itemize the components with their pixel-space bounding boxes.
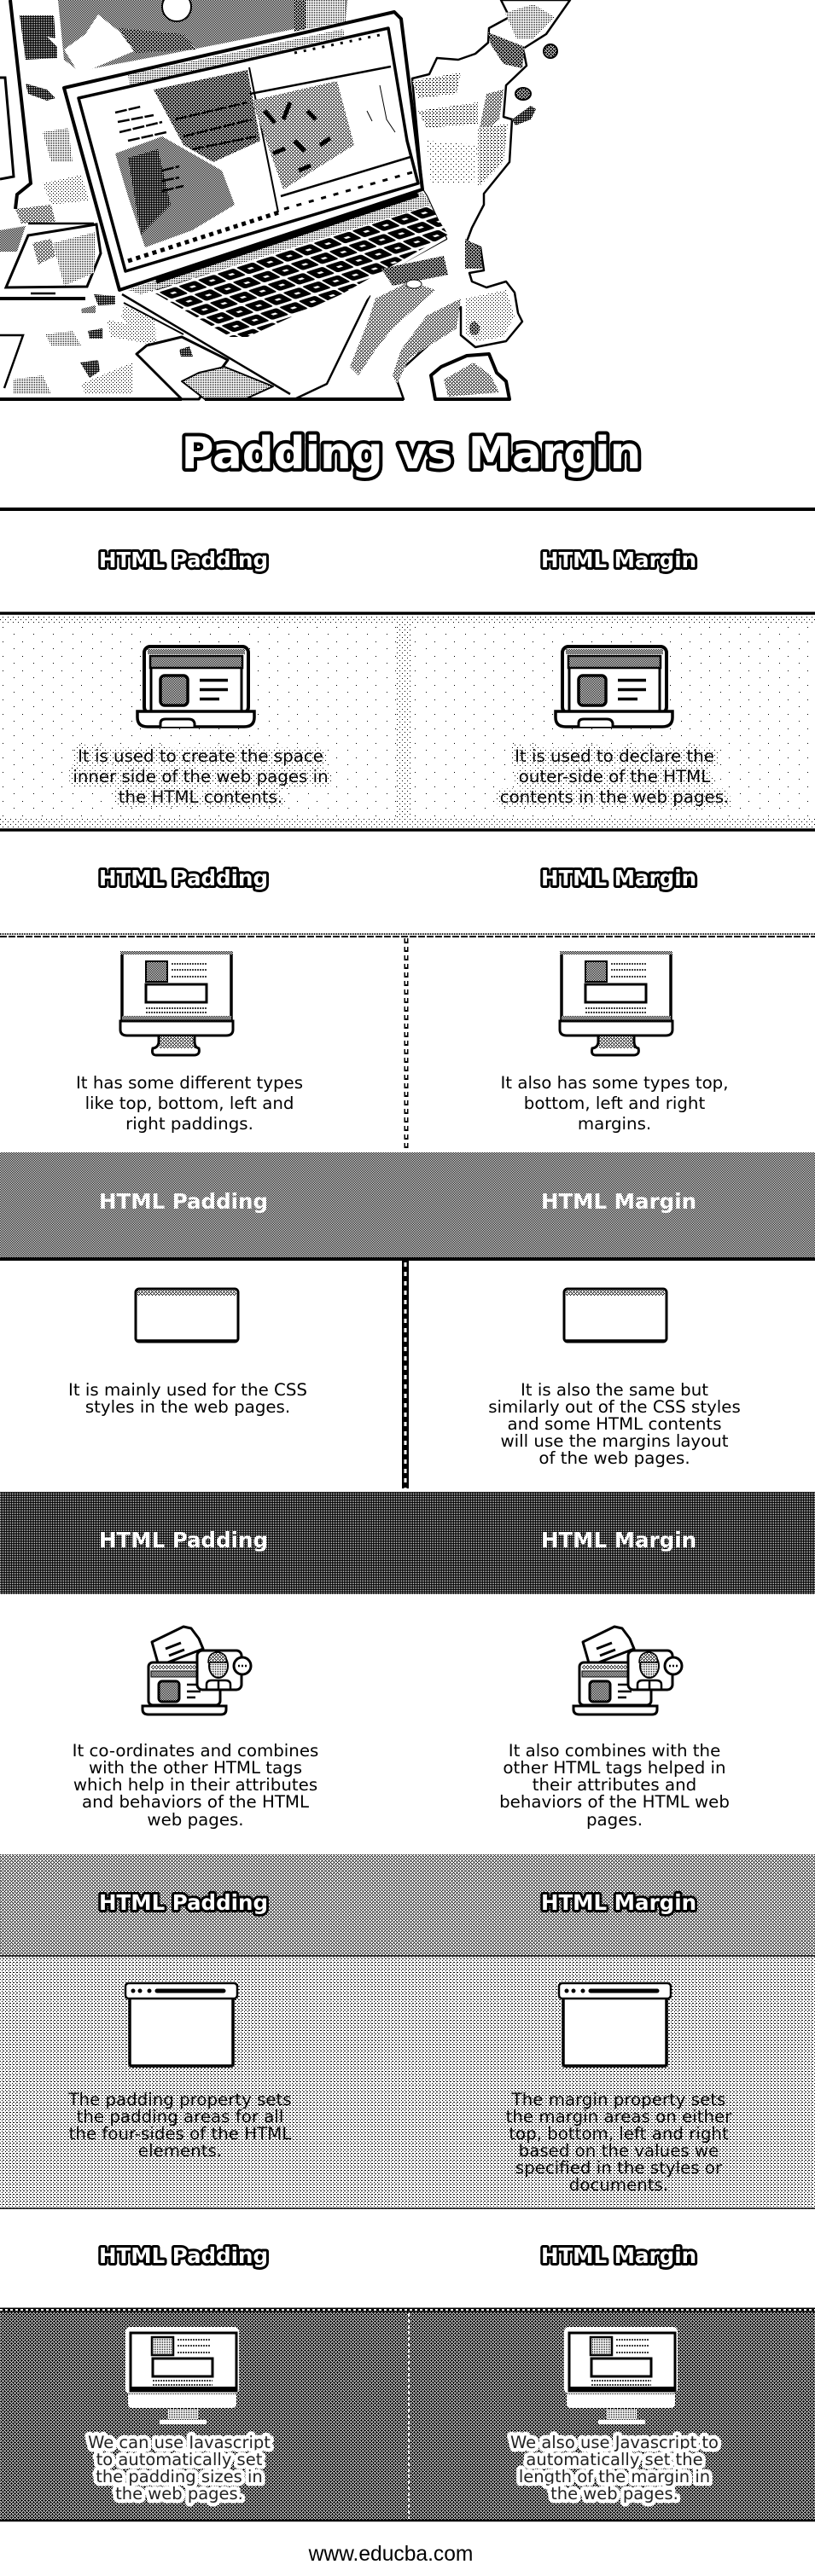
text: margin point 4: pages. <box>586 1810 643 1830</box>
icon: monitor right on dark <box>564 2327 678 2424</box>
text: padding point 5: elements. <box>138 2141 222 2161</box>
text: margin point 1 <box>500 746 729 807</box>
text: margin point 3: similarly out of the CSS styles <box>488 1397 741 1417</box>
text: padding point 2: right paddings. <box>125 1114 253 1134</box>
text: margin point 4: It also combines with the <box>509 1741 720 1761</box>
row 6 header: HTML Margin <box>541 2243 696 2268</box>
text: margin point 6: We also use Javascript to <box>510 2433 719 2452</box>
rock <box>431 354 509 399</box>
row 2 header: HTML Margin <box>541 866 696 891</box>
icon: window right <box>564 1289 667 1342</box>
photo base line <box>0 397 509 401</box>
text: padding point 6: the web pages. <box>115 2484 243 2503</box>
text: margin point 2: bottom, left and right <box>524 1094 705 1113</box>
text: margin point 2: It also has some types top, <box>500 1073 729 1093</box>
laptop lid <box>64 12 422 290</box>
text: padding point 4: and behaviors of the HTML <box>82 1792 309 1812</box>
row 2 panel <box>0 934 815 1152</box>
text: margin point 3: will use the margins layout <box>500 1431 729 1451</box>
title: Padding vs Margin <box>182 428 641 479</box>
text: padding point 4: web pages. <box>147 1810 244 1830</box>
text: margin point 5: based on the values we <box>519 2141 719 2161</box>
text: margin point 5: documents. <box>569 2175 668 2195</box>
text: padding point 5: The padding property sets <box>67 2090 292 2109</box>
icon: person and laptop left <box>143 1627 251 1714</box>
tablet <box>0 223 101 388</box>
text: padding point 1 <box>73 746 329 807</box>
text: margin point 1: outer-side of the HTML <box>519 767 710 786</box>
keyboard deck <box>122 189 448 394</box>
text: margin point 4: behaviors of the HTML web <box>499 1792 730 1812</box>
splash shape <box>294 0 570 399</box>
text: margin point 4: their attributes and <box>533 1775 696 1795</box>
text: margin point 5: the margin areas on either <box>506 2107 732 2126</box>
text: margin point 3: and some HTML contents <box>507 1414 722 1434</box>
text: margin point 2 <box>500 1073 729 1134</box>
row 6 panel <box>0 2309 815 2521</box>
text: padding point 5: the four-sides of the HTML <box>69 2124 291 2144</box>
text: padding point 3 <box>68 1380 307 1417</box>
row 3 header band: HTML Padding <box>99 1189 268 1214</box>
row 5 header band: HTML Margin <box>541 1890 696 1915</box>
row 3 header band: HTML Margin <box>541 1189 696 1214</box>
icon: monitor right <box>560 951 672 1055</box>
text: margin point 5: The margin property sets <box>511 2090 725 2109</box>
row 4 header band: HTML Margin <box>541 1528 696 1552</box>
text: margin point 1: It is used to declare the <box>515 746 714 766</box>
hero photo: laptop with splash <box>0 0 570 399</box>
text: padding point 1: It is used to create the space <box>78 746 323 766</box>
text: margin point 1: contents in the web pages. <box>500 787 729 807</box>
row 2 header <box>99 866 696 891</box>
row 5 panel <box>0 1957 815 2208</box>
row 2 header: HTML Padding <box>99 866 268 891</box>
row 5 header band: HTML Padding <box>99 1890 268 1915</box>
text: padding point 6: the padding sizes in <box>96 2467 263 2486</box>
row 6 header <box>99 2243 696 2268</box>
text: margin point 2: margins. <box>578 1114 651 1134</box>
text: padding point 3: It is mainly used for the CSS <box>68 1380 307 1400</box>
text: padding point 5: the padding areas for all <box>77 2107 283 2126</box>
icon: window left <box>136 1289 238 1342</box>
text: margin point 3: of the web pages. <box>538 1448 690 1468</box>
text: margin point 6: length of the margin in <box>519 2467 710 2486</box>
row 4 header band <box>0 1492 815 1594</box>
text: margin point 5: top, bottom, left and right <box>509 2124 729 2144</box>
text: padding point 6: We can use Javascript <box>88 2433 271 2452</box>
icon: monitor left on dark <box>125 2327 239 2424</box>
text: padding point 4: with the other HTML tags <box>89 1758 302 1778</box>
text: margin point 5 <box>506 2090 732 2195</box>
row 1 header <box>99 548 696 572</box>
row 3 panel <box>68 1261 741 1488</box>
row 1 panel <box>0 613 815 830</box>
text: margin point 3: It is also the same but <box>521 1380 708 1400</box>
column heading: HTML Margin: HTML Margin <box>541 548 696 572</box>
row 5 header band <box>0 1854 815 1956</box>
text: padding point 5 <box>67 2090 292 2161</box>
background blobs behind laptop <box>0 0 347 394</box>
icon: browser window right <box>559 1983 671 2066</box>
column heading: HTML Padding: HTML Padding <box>99 548 268 572</box>
text: padding point 1: inner side of the web pages in <box>73 767 329 786</box>
icon: laptop right <box>556 647 672 727</box>
footer url: www.educba.com <box>308 2543 473 2566</box>
icon: laptop left <box>137 647 254 727</box>
text: padding point 3: styles in the web pages. <box>85 1397 290 1417</box>
text: padding point 2 <box>76 1073 303 1134</box>
text: padding point 4: which help in their attributes <box>73 1775 317 1795</box>
text: margin point 4 <box>499 1741 730 1830</box>
icon: browser window left <box>125 1983 237 2066</box>
row 3 header band <box>0 1152 815 1259</box>
text: padding point 1: the HTML contents. <box>119 787 282 807</box>
text: padding point 2: like top, bottom, left and <box>85 1094 294 1113</box>
icon: monitor left <box>120 951 233 1055</box>
row 4 panel <box>73 1627 730 1830</box>
text: margin point 5: specified in the styles or <box>515 2158 723 2178</box>
text: padding point 4: It co-ordinates and combines <box>73 1741 318 1761</box>
text: padding point 6 <box>88 2433 271 2503</box>
text: margin point 6: automatically set the <box>526 2450 703 2469</box>
text: padding point 2: It has some different types <box>76 1073 303 1093</box>
splash droplets <box>512 44 557 125</box>
text: padding point 4 <box>73 1741 318 1830</box>
text: margin point 4: other HTML tags helped in <box>503 1758 726 1778</box>
text: margin point 6: the web pages. <box>550 2484 678 2503</box>
text: padding point 6: to automatically set <box>96 2450 263 2469</box>
text: margin point 3 <box>488 1380 741 1468</box>
row 6 header: HTML Padding <box>99 2243 268 2268</box>
row 4 header band: HTML Padding <box>99 1528 268 1552</box>
phone and hand <box>121 303 273 399</box>
text: margin point 6 <box>510 2433 719 2503</box>
icon: person and laptop right <box>573 1627 682 1714</box>
